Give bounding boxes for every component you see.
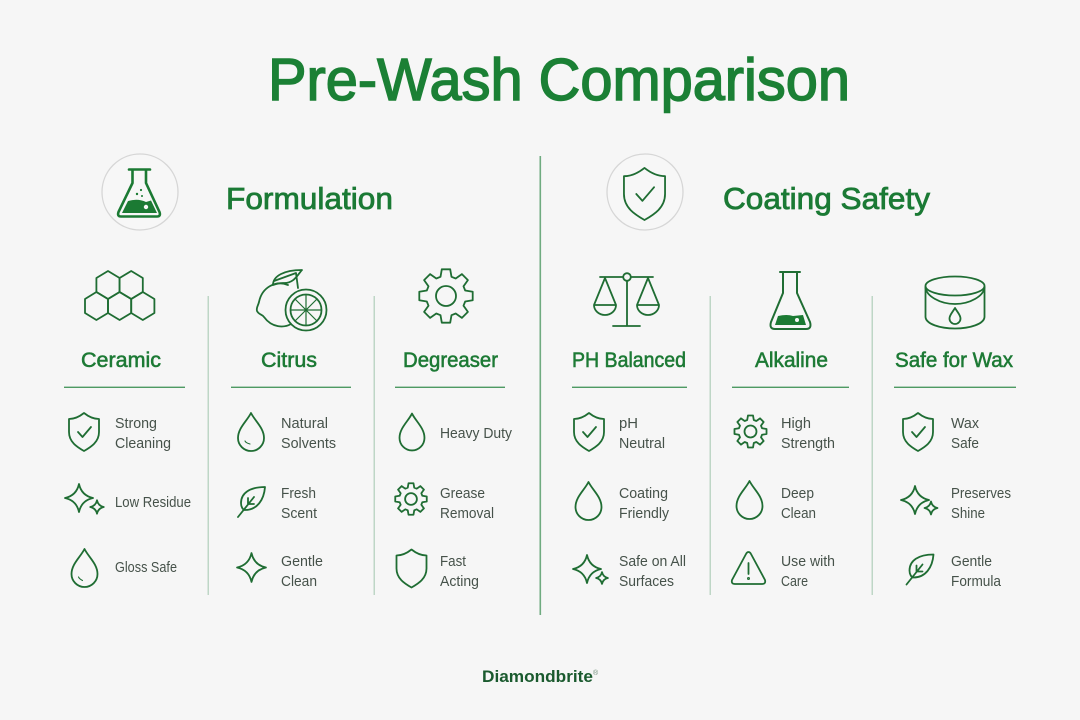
item: Coating Friendly (576, 482, 670, 522)
panel: PH Balanced (572, 273, 687, 590)
item: Gentle Formula (906, 554, 1002, 590)
icon: wax jar (926, 276, 984, 328)
item: Wax Safe: Safe (951, 436, 979, 452)
panel: Alkaline (732, 272, 849, 590)
item: High Strength: High (781, 416, 811, 432)
item: Fresh Scent (238, 486, 317, 522)
item: Heavy Duty: Heavy Duty (440, 426, 513, 442)
icon: gear (419, 269, 473, 323)
heading: Coating Safety: Coating Safety (723, 181, 930, 216)
item: Grease Removal: Grease (440, 486, 485, 502)
item: Fast Acting (396, 550, 479, 590)
item: High Strength: Strength (781, 436, 835, 452)
panel: Safe for Wax (894, 276, 1016, 590)
heading: Degreaser: Degreaser (403, 349, 498, 372)
panel: Degreaser (395, 269, 513, 590)
item: Gentle Formula: Formula (951, 574, 1002, 590)
item: Gentle Clean: Gentle (281, 554, 323, 570)
item: Deep Clean: Clean (781, 506, 816, 522)
item: Preserves Shine: Shine (951, 506, 985, 522)
item: pH Neutral (574, 413, 665, 452)
item: Grease Removal (395, 483, 494, 522)
item: Gloss Safe: Gloss Safe (115, 560, 177, 576)
item: Safe on All Surfaces: Safe on All (619, 554, 686, 570)
footer brand: Diamondbrite (482, 668, 593, 686)
item: Strong Cleaning (69, 413, 171, 452)
item: High Strength (734, 415, 835, 452)
icon: citrus fruit (257, 270, 326, 330)
item: Safe on All Surfaces (573, 554, 686, 590)
item: Natural Solvents: Natural (281, 416, 328, 432)
item: Use with Care (732, 552, 835, 590)
heading: Formulation: Formulation (226, 181, 393, 216)
item: Gentle Clean (237, 553, 323, 590)
item: pH Neutral: pH (619, 416, 638, 432)
icon: balance scales (594, 273, 659, 326)
icon: flask (770, 272, 810, 329)
panel: Citrus (231, 270, 351, 590)
heading: Ceramic: Ceramic (81, 349, 161, 372)
icon: flask in circle (102, 154, 178, 230)
item: Gentle Formula: Gentle (951, 554, 992, 570)
column dividers (208, 296, 873, 595)
item: Preserves Shine (901, 486, 1011, 522)
item: Use with Care: Use with (781, 554, 835, 570)
center divider (540, 156, 541, 615)
item: Low Residue (65, 484, 191, 514)
item: Coating Friendly: Friendly (619, 506, 670, 522)
item: Use with Care: Care (781, 574, 808, 590)
item: Strong Cleaning: Strong (115, 416, 157, 432)
item: Wax Safe: Wax (951, 416, 980, 432)
heading: Citrus: Citrus (261, 349, 317, 372)
heading: PH Balanced: PH Balanced (572, 349, 686, 372)
panel: Formulation heading (102, 154, 393, 230)
item: Deep Clean (736, 481, 816, 522)
item: Fast Acting: Fast (440, 554, 466, 570)
panel: Coating Safety heading (607, 154, 930, 230)
title: Pre-Wash Comparison (268, 47, 850, 113)
item: Low Residue: Low Residue (115, 495, 191, 511)
footer brand: ® (593, 669, 599, 677)
item: Heavy Duty (400, 414, 513, 450)
heading: Alkaline: Alkaline (755, 349, 828, 372)
item: Fresh Scent: Fresh (281, 486, 316, 502)
item: Fast Acting: Acting (440, 574, 479, 590)
item: Coating Friendly: Coating (619, 486, 668, 502)
icon: hexagons (85, 271, 154, 320)
panel: Ceramic (64, 271, 191, 587)
icon: shield in circle (607, 154, 683, 230)
item: Natural Solvents: Solvents (281, 436, 336, 452)
item: Deep Clean: Deep (781, 486, 814, 502)
item: Strong Cleaning: Cleaning (115, 436, 171, 452)
item: Preserves Shine: Preserves (951, 486, 1011, 502)
item: Natural Solvents (238, 413, 336, 452)
item: Gloss Safe (72, 549, 177, 587)
heading: Safe for Wax: Safe for Wax (895, 349, 1013, 372)
item: Grease Removal: Removal (440, 506, 494, 522)
item: pH Neutral: Neutral (619, 436, 665, 452)
item: Safe on All Surfaces: Surfaces (619, 574, 674, 590)
item: Wax Safe (903, 413, 980, 452)
item: Gentle Clean: Clean (281, 574, 317, 590)
item: Fresh Scent: Scent (281, 506, 317, 522)
